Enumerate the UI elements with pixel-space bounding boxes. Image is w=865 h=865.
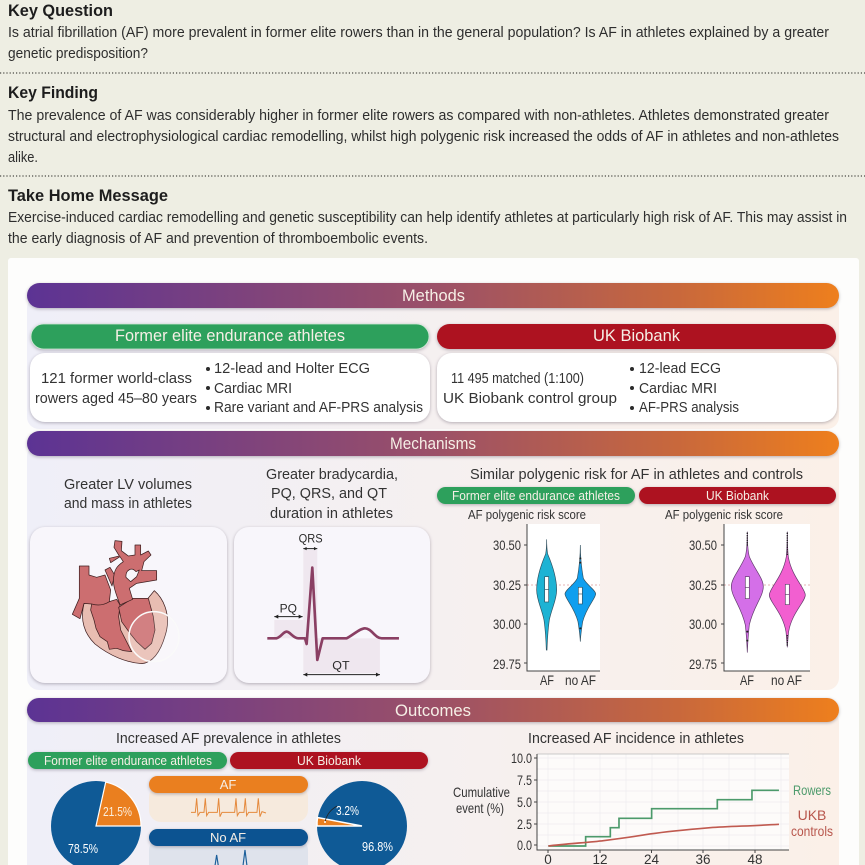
chart: ECG intervals: PQ	[280, 602, 297, 616]
chart: cumulative AF incidence: Rowers	[793, 782, 831, 798]
card: UK Biobank cohort: UK Biobank control group	[443, 390, 617, 407]
label: UK Biobank	[230, 752, 428, 769]
text: LV volumes	[64, 476, 192, 512]
heading: outcomes	[27, 698, 839, 722]
heading: AF incidence: Increased AF incidence in athletes	[528, 730, 744, 747]
card: heart	[30, 527, 227, 683]
pie chart: athletes	[51, 781, 141, 865]
heading: UK Biobank	[437, 324, 836, 349]
chart: athlete violins	[468, 507, 600, 688]
heading: UK Biobank: UK Biobank	[593, 327, 681, 345]
chart: cumulative AF incidence: 2.5	[517, 817, 532, 832]
chart: ECG intervals: QT	[332, 658, 350, 672]
chart: athlete violins: 29.75	[493, 657, 521, 672]
white figure panel	[8, 258, 859, 865]
heading: mechanisms	[27, 431, 839, 456]
heading: outcomes: Outcomes	[395, 702, 471, 720]
chart: athlete violins: 30.25	[493, 578, 521, 593]
heading: former elite endurance athletes: Former elite endurance athletes	[115, 327, 345, 345]
heading: polygenic risk: Similar polygenic risk for AF in athletes and controls	[470, 466, 803, 483]
card: athlete cohort	[30, 353, 430, 422]
text: bradycardia: duration in athletes	[270, 505, 393, 522]
legend: AF	[149, 776, 308, 822]
chart: athlete violins: AF	[540, 673, 554, 688]
card: athlete cohort: rowers aged 45–80 years	[35, 390, 197, 407]
text block: key question: Key Question	[8, 1, 113, 20]
card: UK Biobank cohort: 12-lead ECG	[639, 360, 721, 377]
chart: athlete violins: 30.00	[493, 617, 521, 632]
text block: key finding: alike.	[8, 149, 38, 166]
heading: mechanisms: Mechanisms	[390, 435, 476, 453]
chart: cumulative AF incidence: controls	[791, 823, 833, 839]
pie chart: UK Biobank: 3.2%	[336, 803, 359, 818]
panel: outcomes	[27, 698, 839, 865]
panel: mechanisms	[27, 431, 839, 690]
text: bradycardia: PQ, QRS, and QT	[271, 485, 387, 502]
text: LV volumes: Greater LV volumes	[64, 476, 192, 493]
chart: athlete violins: 30.50	[493, 538, 521, 553]
text block: key question	[8, 1, 829, 62]
pie chart: UK Biobank: 96.8%	[362, 839, 393, 854]
chart: UK Biobank violins: no AF	[771, 673, 802, 688]
card: UK Biobank cohort: 11 495 matched (1:100)	[451, 370, 584, 387]
chart: cumulative AF incidence: UKB	[798, 807, 826, 823]
chart: UK Biobank violins: 30.00	[689, 617, 717, 632]
label: UK Biobank: UK Biobank	[297, 753, 361, 768]
chart: cumulative AF incidence	[453, 751, 833, 865]
card: UK Biobank cohort: Cardiac MRI	[639, 380, 717, 397]
text block: key finding: Key Finding	[8, 83, 98, 102]
text block: take home message: the early diagnosis of AF and prevention of thromboembolic events.	[8, 230, 428, 247]
chart: cumulative AF incidence: 7.5	[517, 773, 532, 788]
chart: UK Biobank violins: AF polygenic risk score	[665, 507, 783, 522]
chart: cumulative AF incidence: 0.0	[517, 838, 532, 853]
text block: key finding: The prevalence of AF was considerably higher in former elite rowers as compared with non-athletes. Athletes demonstrated greater	[8, 107, 829, 124]
heading: former elite endurance athletes	[31, 324, 429, 349]
pie chart: athletes: 21.5%	[103, 804, 132, 819]
text: LV volumes: and mass in athletes	[64, 495, 192, 512]
chart: cumulative AF incidence: event (%)	[456, 800, 504, 816]
label: athletes: Former elite endurance athletes	[44, 753, 212, 768]
card: athlete cohort: Rare variant and AF-PRS analysis	[214, 399, 423, 416]
icon: heart	[72, 541, 179, 664]
chart: UK Biobank violins	[665, 507, 810, 688]
text block: key question: Is atrial fibrillation (AF) more prevalent in former elite rowers than in the general population? Is AF in athletes explained by a greater	[8, 24, 829, 41]
chart: athlete violins: no AF	[565, 673, 596, 688]
chart: ECG intervals	[267, 532, 399, 677]
chart: cumulative AF incidence: 5.0	[517, 795, 532, 810]
text block: take home message: Take Home Message	[8, 186, 168, 205]
pie chart: UK Biobank	[317, 781, 407, 865]
chart: UK Biobank violins: 30.25	[689, 578, 717, 593]
card: athlete cohort: 12-lead and Holter ECG	[214, 360, 370, 377]
heading: AF prevalence: Increased AF prevalence in athletes	[116, 730, 341, 747]
chart: athlete violins: AF polygenic risk score	[468, 507, 586, 522]
label: UK Biobank: UK Biobank	[706, 488, 769, 503]
card: UK Biobank cohort: AF-PRS analysis	[639, 399, 739, 416]
text block: take home message	[8, 186, 847, 247]
text block: key finding	[8, 83, 839, 166]
label: athletes: Former elite endurance athletes	[452, 488, 620, 503]
heading: methods	[27, 283, 839, 308]
text: bradycardia	[266, 466, 398, 522]
panel: methods	[27, 283, 839, 429]
chart: cumulative AF incidence: 10.0	[511, 751, 532, 766]
chart: cumulative AF incidence: Cumulative	[453, 784, 510, 800]
legend: no AF: No AF	[210, 830, 246, 845]
legend: no AF	[149, 829, 308, 865]
pie chart: athletes: 78.5%	[68, 841, 98, 856]
chart: UK Biobank violins: 29.75	[689, 657, 717, 672]
card: ECG	[234, 527, 430, 683]
text block: key question: genetic predisposition?	[8, 45, 148, 62]
card: athlete cohort: 121 former world-class	[41, 370, 192, 387]
label: UK Biobank	[639, 487, 836, 504]
chart: UK Biobank violins: AF	[740, 673, 754, 688]
chart: UK Biobank violins: 30.50	[689, 538, 717, 553]
card: UK Biobank cohort	[437, 353, 837, 422]
chart: ECG intervals: QRS	[299, 532, 323, 546]
text: bradycardia: Greater bradycardia,	[266, 466, 398, 483]
heading: methods: Methods	[402, 287, 465, 305]
legend: AF: AF	[220, 777, 236, 792]
card: athlete cohort: Cardiac MRI	[214, 380, 292, 397]
